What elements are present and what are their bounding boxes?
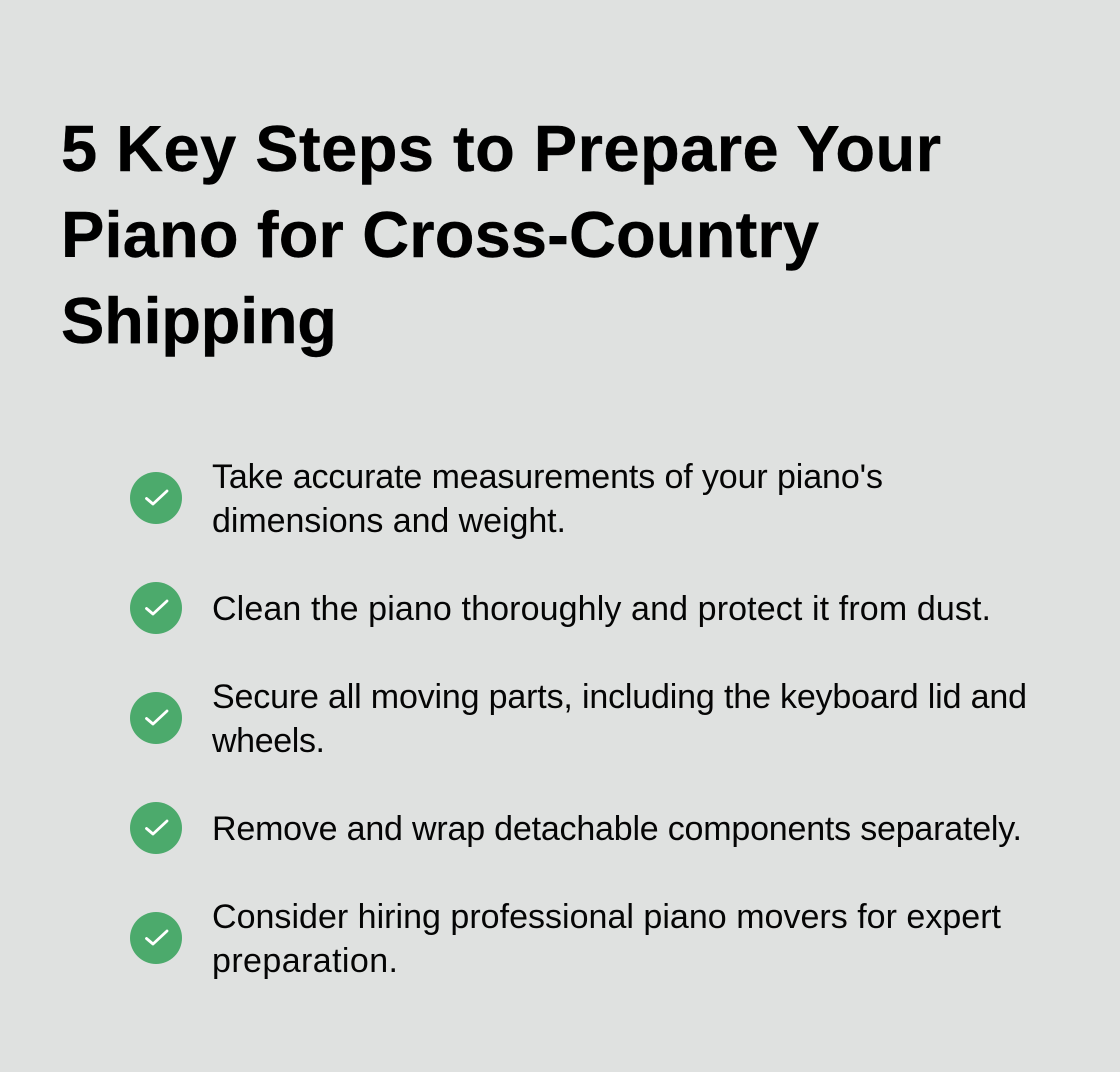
item 4: detachable components: Remove and wrap detachable components separately. — [212, 810, 1022, 848]
item 3: secure parts: wheels. — [211, 722, 325, 760]
item 5: professional movers: Consider hiring professional piano movers for expert — [212, 898, 1002, 936]
item 1: measurements — [130, 458, 883, 540]
title: Shipping — [61, 284, 337, 357]
item 1: measurements: dimensions and weight. — [212, 502, 566, 540]
item 4: detachable components — [130, 802, 1022, 854]
item 3: secure parts: Secure all moving parts, including the keyboard lid and — [212, 678, 1027, 716]
checklist — [130, 458, 1027, 980]
item 5: professional movers — [130, 898, 1002, 980]
item 3: secure parts — [130, 678, 1027, 760]
item 1: measurements: Take accurate measurements of your piano's — [212, 458, 883, 496]
item 2: clean: Clean the piano thoroughly and protect it from dust. — [212, 590, 991, 628]
title: 5 Key Steps to Prepare Your — [61, 112, 941, 185]
item 5: professional movers: preparation. — [212, 942, 398, 980]
item 2: clean — [130, 582, 991, 634]
title — [61, 112, 941, 357]
title: Piano for Cross-Country — [61, 198, 819, 271]
